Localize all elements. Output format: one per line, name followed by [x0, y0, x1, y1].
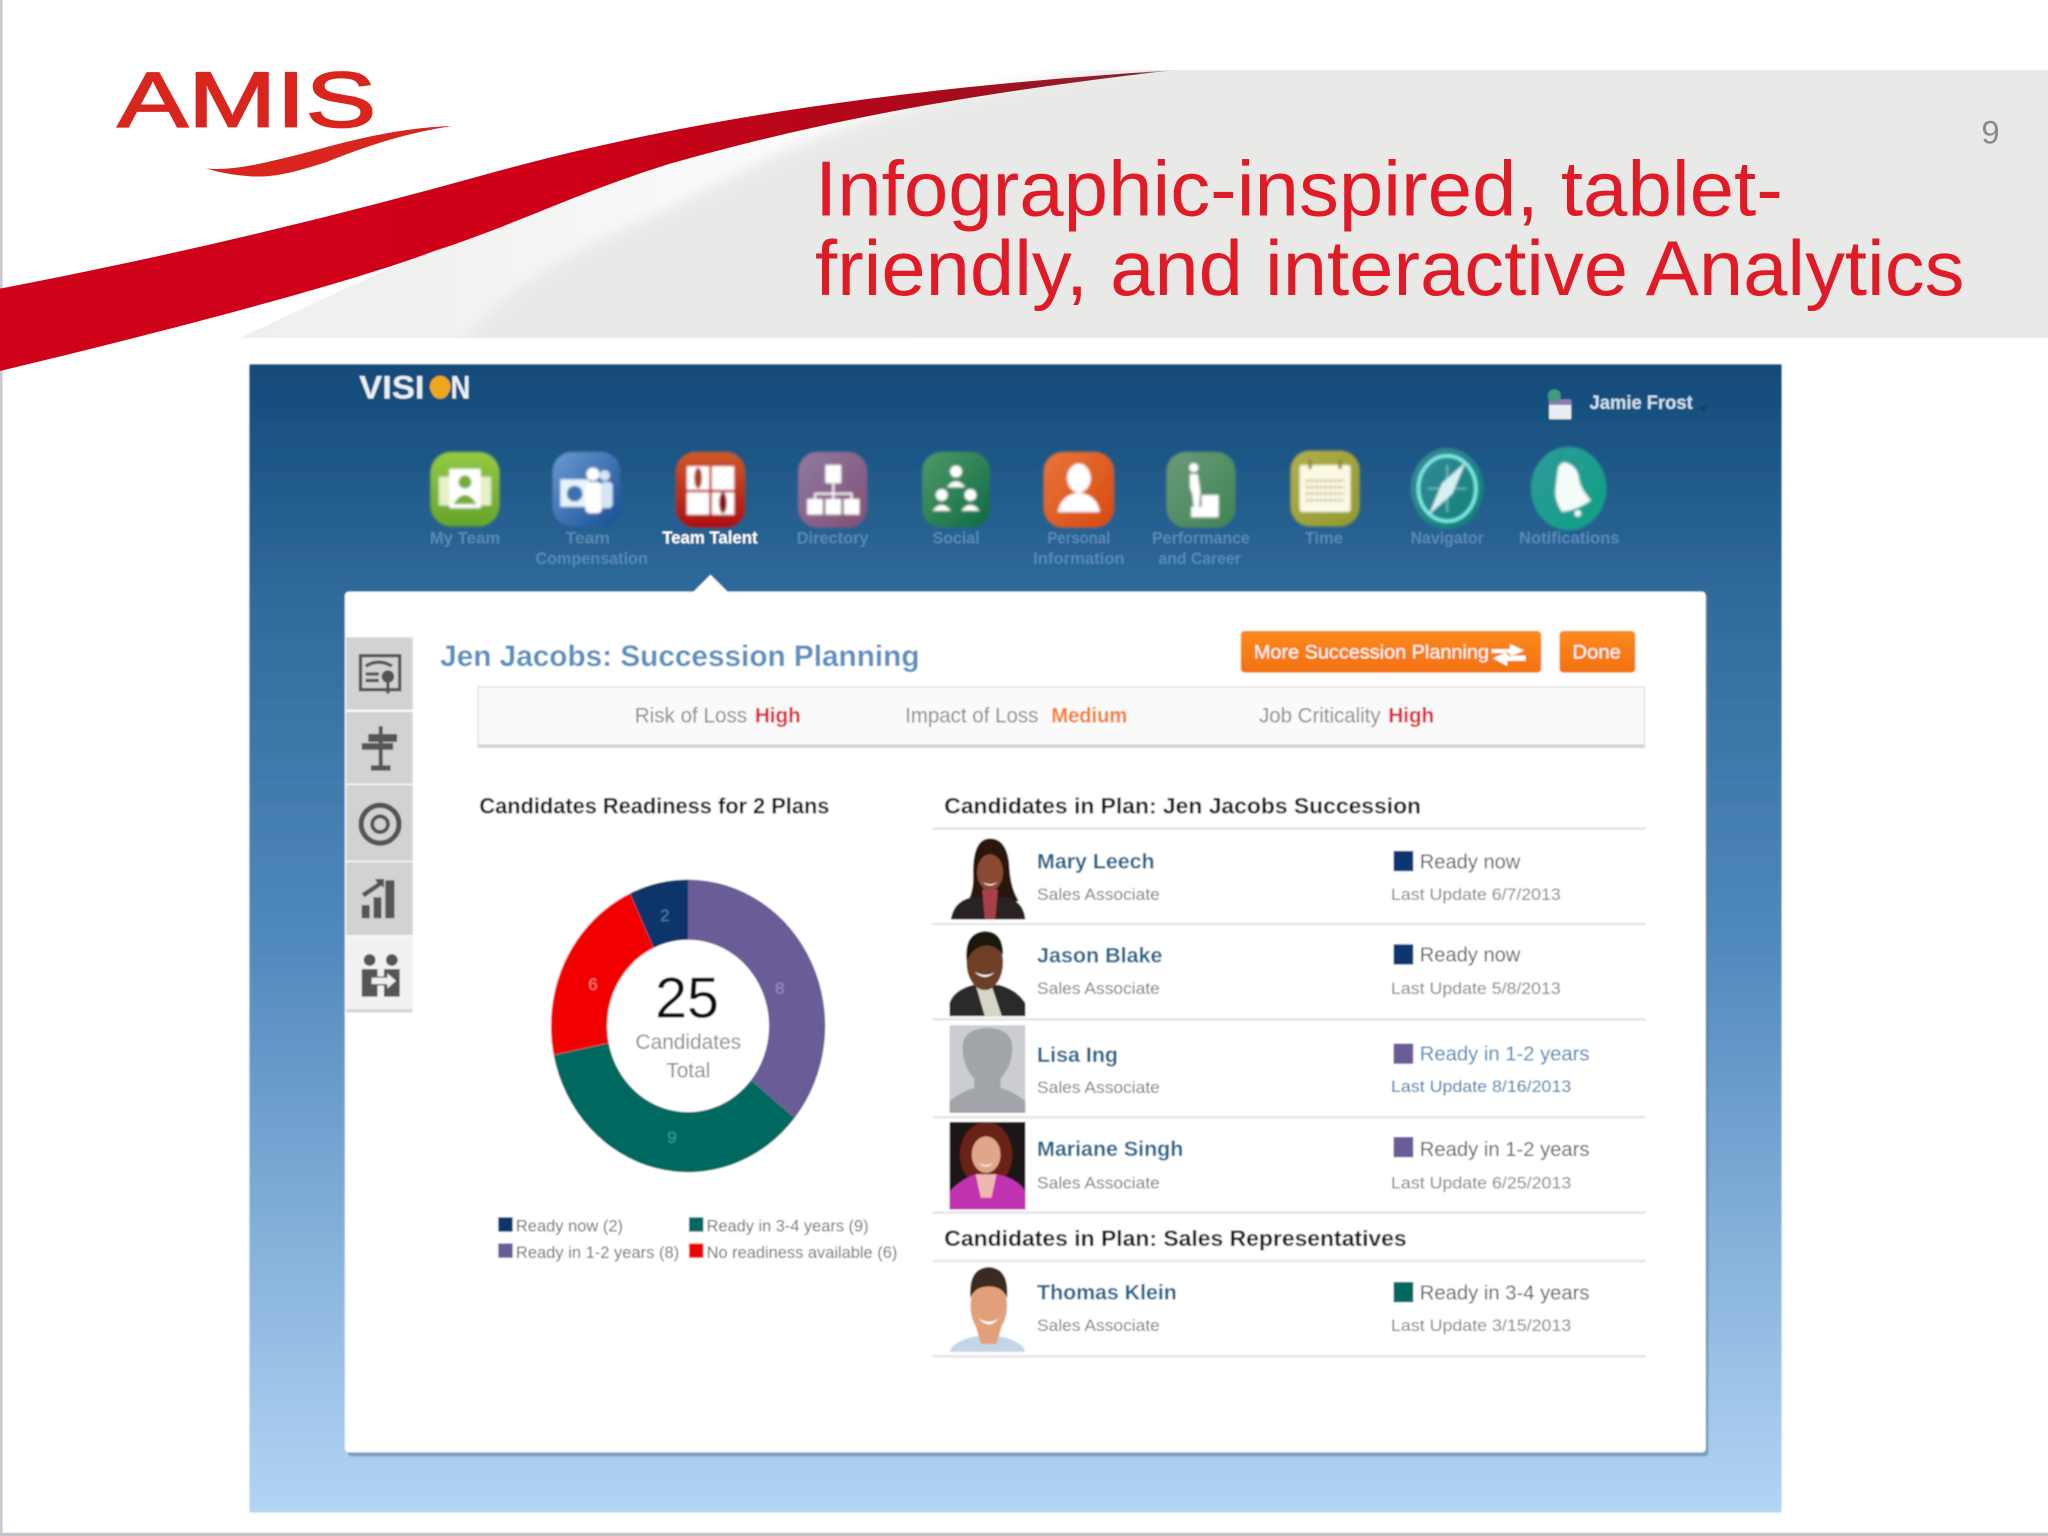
tab icon: certificate — [360, 656, 400, 694]
chart legend — [498, 1217, 897, 1262]
portrait: Thomas Klein — [950, 1267, 1025, 1352]
user menu: Jamie Frost — [1548, 389, 1707, 419]
nav icon: My Team — [430, 452, 500, 547]
risk summary bar: Job Criticality — [1259, 704, 1381, 727]
title: friendly, and interactive Analytics — [815, 224, 1964, 312]
nav icon: Personal Information — [1033, 452, 1125, 568]
candidate: Thomas Klein: Last Update 3/15/2013 — [1391, 1316, 1571, 1335]
title — [815, 145, 1964, 312]
candidate: Thomas Klein — [950, 1267, 1590, 1352]
risk summary bar: Impact of Loss — [905, 704, 1038, 727]
donut chart: 25 — [655, 966, 719, 1030]
slide number: 9 — [1981, 114, 2000, 151]
risk summary bar: High — [755, 704, 801, 727]
candidate: Jason Blake: Last Update 5/8/2013 — [1391, 979, 1561, 998]
chart legend: Ready in 3-4 years (9) — [707, 1218, 869, 1236]
risk summary bar — [478, 687, 1644, 748]
portrait: placeholder silhouette — [950, 1025, 1025, 1113]
nav icon: Directory — [797, 452, 869, 547]
candidate: Jason Blake: Jason Blake — [1037, 943, 1162, 968]
candidate: Jason Blake — [950, 931, 1561, 1016]
nav icon: Team Compensation: Team — [566, 529, 610, 547]
candidate: Mariane Singh: Last Update 6/25/2013 — [1391, 1174, 1571, 1193]
user menu: Jamie Frost: Jamie Frost — [1590, 393, 1693, 414]
nav icon: My Team: My Team — [430, 529, 500, 547]
candidate: Lisa Ing: Ready in 1-2 years — [1420, 1044, 1590, 1066]
vision logo: VISI — [359, 368, 424, 405]
nav icon: Directory: Directory — [797, 529, 869, 547]
header band — [241, 70, 2048, 338]
candidate: Thomas Klein: Sales Associate — [1037, 1316, 1160, 1335]
nav icon: Performance and Career — [1152, 452, 1250, 568]
risk summary bar: High — [1388, 704, 1434, 727]
candidate: Lisa Ing: Lisa Ing — [1037, 1042, 1118, 1067]
nav icon: Navigator: Navigator — [1411, 529, 1484, 547]
candidate: Mary Leech — [951, 839, 1561, 920]
portrait: Mary Leech — [951, 839, 1025, 920]
candidate: Mary Leech: Sales Associate — [1037, 885, 1160, 904]
portrait: Mariane Singh — [950, 1122, 1025, 1209]
nav icon: Personal Information: Information — [1033, 550, 1125, 568]
nav icon: Social: Social — [933, 529, 980, 547]
tab icon: target — [361, 805, 399, 843]
app screenshot — [249, 364, 1782, 1512]
nav icon: Navigator — [1411, 448, 1484, 547]
candidate: Jason Blake: Sales Associate — [1037, 979, 1160, 998]
candidate: Mariane Singh: Ready in 1-2 years — [1420, 1139, 1590, 1161]
candidate: Mary Leech: Mary Leech — [1037, 849, 1155, 874]
tab icon: succession people — [362, 954, 400, 997]
risk summary bar: Medium — [1051, 704, 1127, 727]
donut chart: 2 — [660, 906, 670, 925]
nav icon: Social — [922, 452, 990, 547]
nav icon: Team Talent (selected) — [662, 452, 758, 547]
red swoosh — [0, 71, 1170, 371]
panel pointer — [692, 575, 729, 593]
tab icon: signpost — [362, 726, 397, 771]
portrait: Jason Blake — [950, 931, 1025, 1016]
candidate: Mary Leech: Ready now — [1420, 852, 1521, 874]
vision logo: N — [451, 368, 470, 405]
heading: Sales Representatives candidates: Candidates in Plan: Sales Representatives — [944, 1226, 1407, 1251]
candidate: Lisa Ing: Sales Associate — [1037, 1078, 1160, 1097]
tab icon: bar chart — [362, 879, 394, 918]
chart heading: Candidates Readiness for 2 Plans — [479, 794, 829, 819]
candidate: Lisa Ing — [950, 1025, 1590, 1113]
main white panel — [345, 592, 1708, 1456]
donut chart: 6 — [588, 975, 598, 994]
donut chart: Total — [666, 1060, 710, 1083]
candidate: Mariane Singh — [950, 1122, 1590, 1209]
button: Done: Done — [1573, 641, 1621, 663]
candidate: Mariane Singh: Sales Associate — [1037, 1174, 1160, 1193]
candidate: Mary Leech: Last Update 6/7/2013 — [1391, 885, 1561, 904]
candidate: Thomas Klein: Ready in 3-4 years — [1420, 1283, 1590, 1305]
side tabs — [346, 637, 413, 1012]
nav icon: Performance and Career: and Career — [1159, 550, 1241, 568]
button: More Succession Planning — [1241, 631, 1541, 673]
vision logo: O — [430, 368, 451, 405]
chart legend: Ready now (2) — [516, 1218, 623, 1236]
logo: AMIS: AMIS — [118, 56, 376, 144]
candidate: Mariane Singh: Mariane Singh — [1037, 1136, 1183, 1161]
nav icon: Time — [1290, 451, 1360, 547]
candidate: Thomas Klein: Thomas Klein — [1037, 1280, 1177, 1305]
donut chart: Candidates — [636, 1031, 741, 1054]
vision logo — [359, 368, 470, 405]
nav icon: Time: Time — [1305, 529, 1343, 547]
donut chart: 8 — [775, 979, 784, 998]
nav icon: Notifications — [1519, 447, 1620, 547]
button: More Succession Planning: More Succession Planning — [1254, 641, 1489, 663]
candidate: Lisa Ing: Last Update 8/16/2013 — [1391, 1077, 1571, 1096]
nav icon: Performance and Career: Performance — [1152, 529, 1250, 547]
heading: Jen Jacobs Succession Planning: Jen Jacobs: Succession Planning — [440, 640, 920, 673]
donut chart: 9 — [667, 1128, 677, 1147]
risk summary bar: Risk of Loss — [635, 704, 747, 727]
heading: Jen Jacobs succession candidates: Candidates in Plan: Jen Jacobs Succession — [944, 794, 1421, 819]
nav icon: Team Compensation: Compensation — [536, 550, 648, 568]
title: Infographic-inspired, tablet- — [815, 145, 1783, 233]
candidate: Jason Blake: Ready now — [1420, 944, 1521, 966]
chart legend: No readiness available (6) — [707, 1244, 897, 1262]
donut chart — [551, 880, 825, 1172]
button: Done — [1560, 631, 1635, 673]
nav icon: Personal Information: Personal — [1048, 529, 1110, 547]
nav icon: Team Compensation — [536, 452, 648, 568]
nav icon: Team Talent (selected): Team Talent — [662, 527, 758, 547]
nav icon: Notifications: Notifications — [1519, 529, 1620, 547]
chart legend: Ready in 1-2 years (8) — [516, 1244, 679, 1262]
logo: AMIS — [118, 56, 452, 177]
